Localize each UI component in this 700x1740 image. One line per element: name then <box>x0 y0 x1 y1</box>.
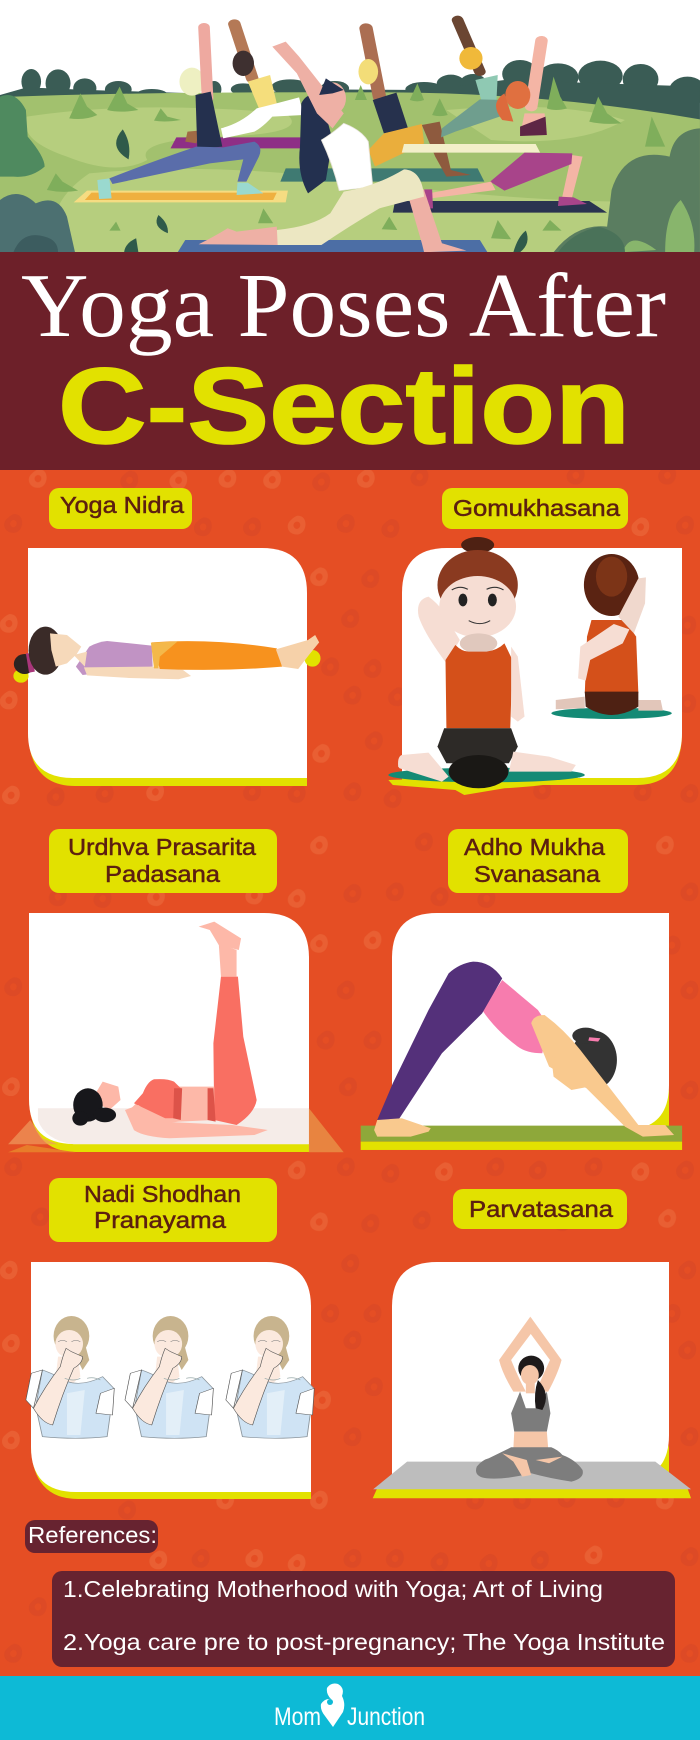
label: Yoga Nidra <box>49 488 192 529</box>
panel: Urdhva Prasarita Padasana <box>8 829 344 1152</box>
references heading: References: <box>28 1522 157 1548</box>
right bushes <box>554 128 700 252</box>
label: Nadi Shodhan Pranayama <box>49 1178 277 1242</box>
card <box>28 548 307 786</box>
panel: orange background <box>0 470 700 1676</box>
panel: Yoga Nidra <box>13 488 321 786</box>
logo: MomJunction <box>274 1684 425 1731</box>
figure: navy top, blue jeans <box>74 27 288 202</box>
background swirl pattern <box>0 466 698 1663</box>
grass tufts <box>47 77 665 239</box>
panel: Adho Mukha Svanasana <box>361 829 682 1150</box>
panel: Nadi Shodhan Pranayama <box>26 1178 314 1499</box>
illustration: alternate nostril breathing <box>26 1316 314 1438</box>
tree line <box>0 60 700 133</box>
footer band <box>0 1676 700 1740</box>
left bushes <box>0 95 45 177</box>
hero illustration: yoga class in a park <box>0 0 700 252</box>
title: C-Section: C-Section <box>58 345 630 466</box>
logo: MomJunction: Junction <box>347 1703 425 1731</box>
illustration: seated mountain pose <box>373 1317 691 1498</box>
label: Adho Mukha Svanasana: Svanasana <box>474 861 600 887</box>
card <box>392 913 669 1130</box>
meadow <box>0 92 700 252</box>
label: Adho Mukha Svanasana <box>448 829 628 893</box>
references list: 2.Yoga care pre to post-pregnancy; The Yoga Institute <box>63 1629 665 1655</box>
label: Gomukhasana <box>442 488 628 529</box>
card <box>31 1262 311 1499</box>
title: Yoga Poses After <box>21 255 666 356</box>
panel: Parvatasana <box>373 1189 691 1498</box>
label: Urdhva Prasarita Padasana <box>49 829 277 893</box>
label: Urdhva Prasarita Padasana: Urdhva Prasarita <box>68 834 256 860</box>
illustration: legs raised pose <box>8 922 344 1152</box>
references list <box>52 1571 675 1667</box>
figure: white top, cream trousers (front) <box>178 42 487 252</box>
label: Gomukhasana: Gomukhasana <box>453 495 620 521</box>
meadow light patches <box>25 107 700 252</box>
label: Parvatasana <box>453 1189 627 1229</box>
illustration: lying pose <box>13 627 321 683</box>
figure: teal top, back view <box>402 20 540 153</box>
sky <box>0 0 700 252</box>
card <box>29 913 309 1152</box>
illustration: cow face pose <box>388 537 672 795</box>
card <box>392 1262 669 1480</box>
label: Adho Mukha Svanasana: Adho Mukha <box>464 834 605 860</box>
figure: navy top, yellow shorts <box>280 28 484 182</box>
card <box>402 548 682 785</box>
label: Nadi Shodhan Pranayama: Pranayama <box>94 1207 226 1233</box>
label: Nadi Shodhan Pranayama: Nadi Shodhan <box>84 1181 241 1207</box>
figure: yellow top, white trousers <box>171 24 304 148</box>
label: Yoga Nidra: Yoga Nidra <box>60 492 184 518</box>
panel: Gomukhasana <box>388 488 682 795</box>
logo: MomJunction: Mom <box>274 1703 321 1731</box>
label: Urdhva Prasarita Padasana: Padasana <box>105 861 220 887</box>
illustration: downward dog pose <box>361 962 682 1150</box>
dark leaves <box>116 129 528 252</box>
figure: red hair, burgundy top <box>393 41 607 213</box>
panel: title band <box>0 252 700 470</box>
label: Parvatasana: Parvatasana <box>469 1196 613 1222</box>
references list: 1.Celebrating Motherhood with Yoga; Art of Living <box>63 1576 603 1602</box>
